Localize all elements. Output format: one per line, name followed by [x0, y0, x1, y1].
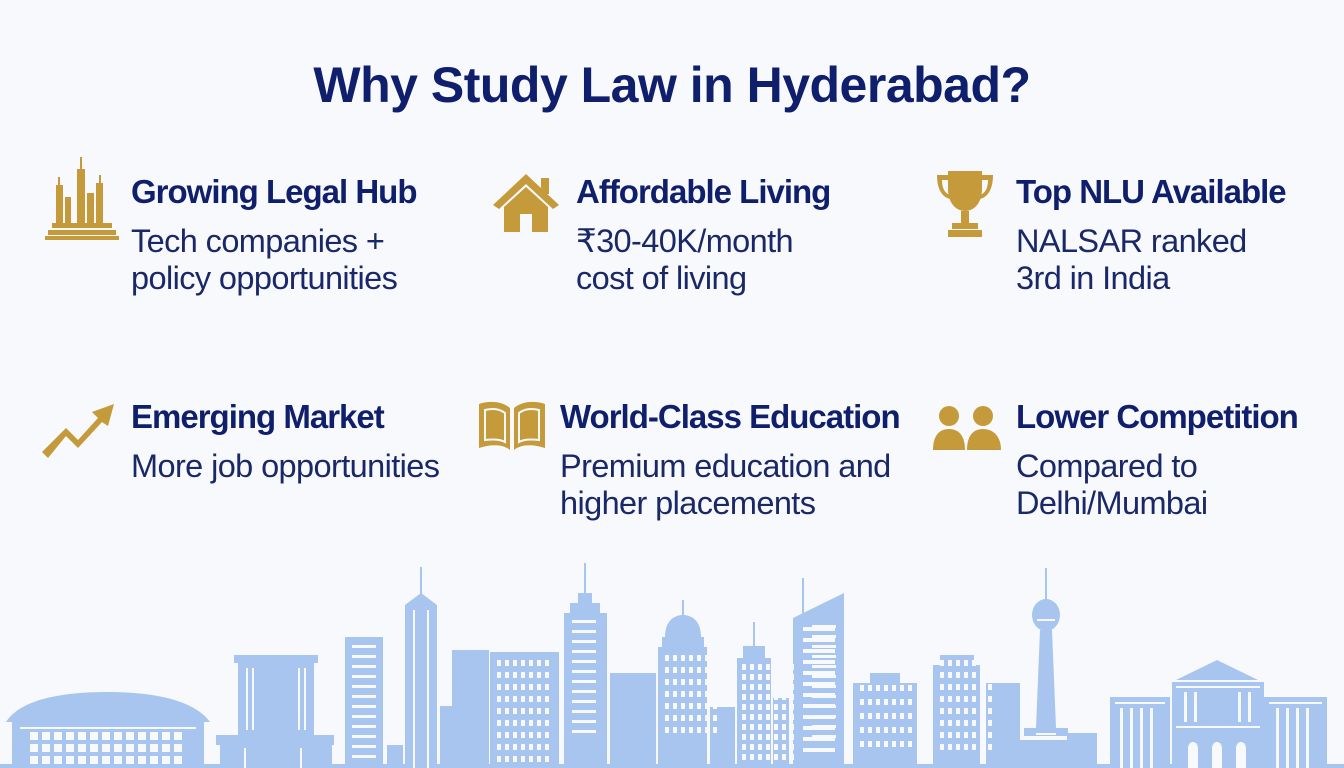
item: lower competition: Lower Competition: [1016, 398, 1298, 435]
item: emerging market: [131, 398, 439, 484]
icon: trophy: [937, 171, 993, 237]
skyline illustration: [0, 563, 1344, 768]
item: emerging market: Emerging Market: [131, 398, 384, 435]
item: lower competition: Delhi/Mumbai: [1016, 485, 1207, 521]
icon: trend arrow: [42, 404, 114, 458]
item: top NLU: NALSAR ranked: [1016, 223, 1247, 259]
item: lower competition: [1016, 398, 1298, 521]
item: top NLU: Top NLU Available: [1016, 173, 1286, 210]
item: world-class education: higher placements: [560, 485, 815, 521]
icon: house: [493, 174, 559, 232]
item: affordable living: cost of living: [576, 260, 746, 296]
item: growing legal hub: Tech companies +: [131, 223, 384, 259]
item: world-class education: Premium education and: [560, 448, 891, 484]
item: growing legal hub: policy opportunities: [131, 260, 397, 296]
item: affordable living: ₹30-40K/month: [576, 223, 793, 259]
item: top NLU: [1016, 173, 1286, 296]
item: growing legal hub: Growing Legal Hub: [131, 173, 416, 210]
icon: open book: [479, 402, 545, 450]
item: growing legal hub: [131, 173, 416, 296]
item: world-class education: World-Class Education: [560, 398, 900, 435]
item: top NLU: 3rd in India: [1016, 260, 1170, 296]
icon: people: [933, 406, 1001, 450]
item: emerging market: More job opportunities: [131, 448, 439, 484]
title: Why Study Law in Hyderabad?: [313, 57, 1031, 113]
item: lower competition: Compared to: [1016, 448, 1197, 484]
item: affordable living: [576, 173, 830, 296]
item: world-class education: [560, 398, 900, 521]
icon: city buildings: [45, 157, 119, 240]
item: affordable living: Affordable Living: [576, 173, 830, 210]
